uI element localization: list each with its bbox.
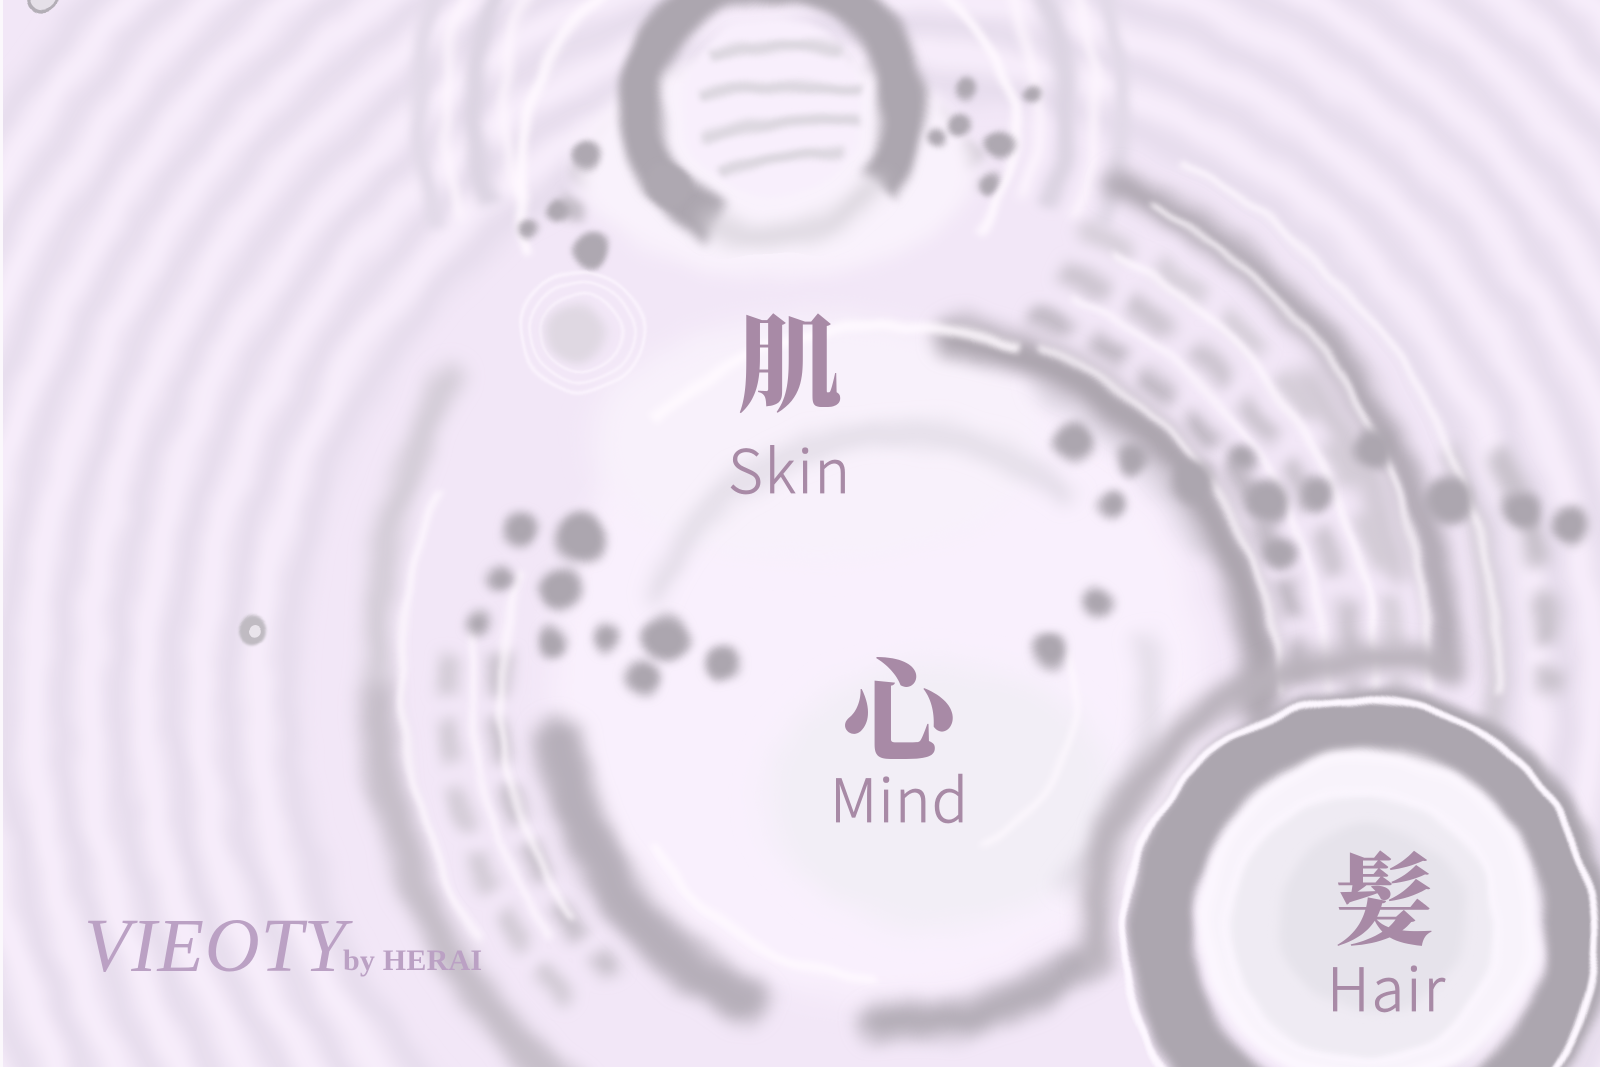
label: mind [830, 623, 974, 840]
top-left droplet [31, 0, 57, 11]
label: mind: 心 [842, 623, 974, 785]
top ring outer soft bands [418, 0, 1122, 228]
top ring cells [521, 77, 1042, 267]
label: skin [728, 283, 850, 511]
white highlight arcs [401, 163, 1500, 980]
drop ripple [520, 270, 643, 393]
label: skin: Skin [728, 424, 850, 511]
main dark arcs [377, 184, 1449, 1067]
left edge [0, 0, 3, 1067]
soft inner arcs [653, 388, 1204, 888]
brand logo [84, 904, 482, 988]
dashed interference bands [447, 230, 1551, 1015]
label: skin: 肌 [737, 283, 843, 434]
brand logo: by HERAI [343, 944, 482, 977]
hair ring [1094, 657, 1596, 1067]
label: hair: 髪 [1334, 821, 1434, 965]
top ring [520, 0, 1015, 276]
label: hair: Hair [1327, 942, 1445, 1029]
label: mind: Mind [830, 753, 968, 840]
small droplet [239, 616, 267, 645]
central pale area [551, 347, 1204, 1000]
label: hair [1327, 821, 1445, 1029]
interference blobs [468, 421, 1591, 696]
brand logo: VIEOTY [84, 904, 354, 988]
